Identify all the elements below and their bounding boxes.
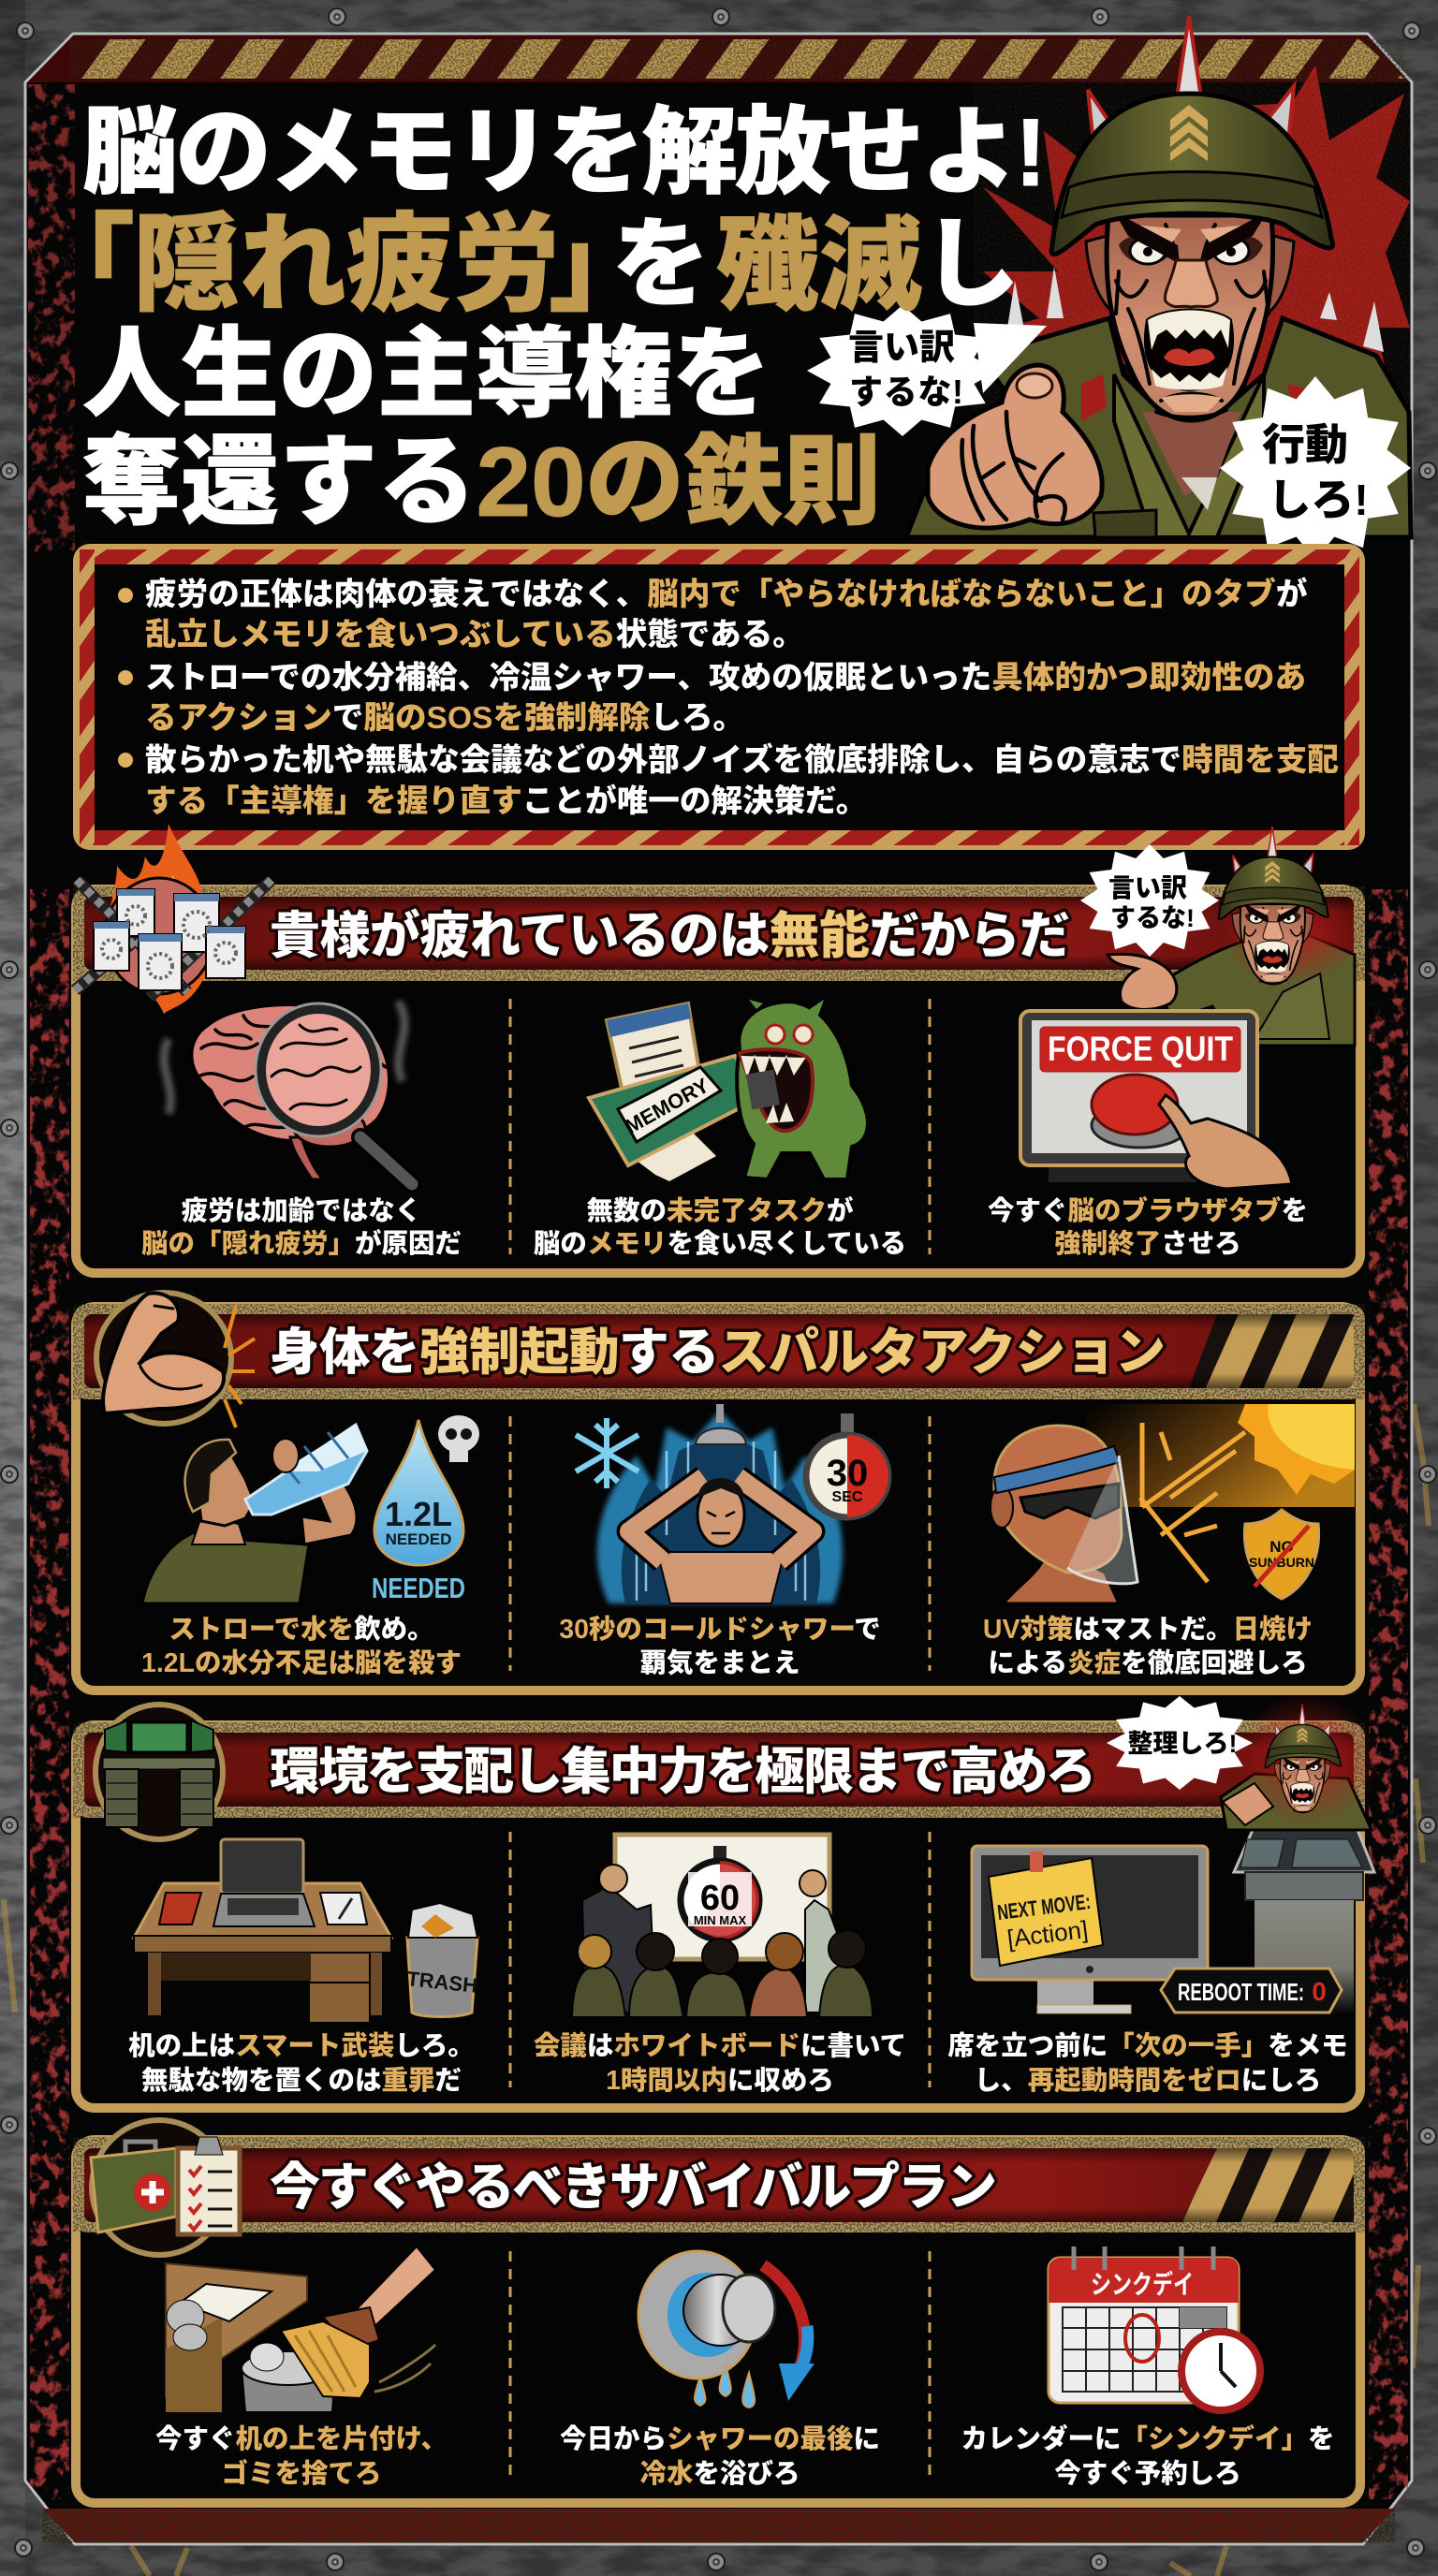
icon: UV face shield man [990, 1426, 1137, 1603]
icon: calendar with clock: シンクデイ [1091, 2269, 1194, 2299]
captions: 今すぐ脳のブラウザタブを [988, 1195, 1308, 1226]
icon: 30 sec stopwatch: 30 [827, 1453, 868, 1494]
icon: force quit monitor [1020, 1011, 1292, 1189]
icon: meeting whiteboard 60 min: MIN MAX [694, 1913, 746, 1927]
icon: no sunburn shield [1244, 1510, 1319, 1599]
icon: flexed arm badge [96, 1293, 255, 1427]
captions: 覇気をまとえ [639, 1648, 800, 1678]
captions: 疲労は加齢ではなく [182, 1196, 421, 1226]
captions: カレンダーに「シンクデイ」を [961, 2423, 1335, 2454]
icon: command desk badge [95, 1705, 223, 1839]
title: 奪還する20の鉄則 [82, 428, 881, 537]
icon: force quit monitor: FORCE QUIT [1048, 1030, 1233, 1068]
captions: 机の上はスマート武装しろ。 [128, 2031, 475, 2061]
title: 脳のメモリを解放せよ! [82, 99, 1047, 206]
title: 殲滅 [716, 209, 922, 324]
speech bubble: small: 言い訳 [1108, 873, 1187, 902]
icon: sun and reflected rays [1086, 1404, 1355, 1582]
title: し [922, 211, 1020, 319]
summary text: 散らかった机や無駄な会議などの外部ノイズを徹底排除し、自らの意志で時間を支配 [145, 741, 1339, 778]
icon: cold shower [597, 1404, 843, 1603]
captions: 今すぐ机の上を片付け、 [155, 2423, 448, 2454]
icon: desk with laptop and trash: TRASH [405, 1967, 478, 1998]
icon: 30 sec stopwatch [806, 1413, 888, 1517]
section 1 panel [73, 886, 1365, 1273]
heading: 今すぐやるべきサバイバルプラン [270, 2159, 997, 2216]
icon: desk with laptop and trash [134, 1839, 478, 2023]
speech bubble: excuse: するな! [849, 373, 963, 411]
icon: water drop 1.2L: 1.2L [385, 1495, 452, 1533]
section 4 panel [73, 2137, 1365, 2503]
summary panel [73, 544, 1365, 850]
captions: 30秒のコールドシャワーで [559, 1615, 881, 1645]
speech bubble: small [1080, 844, 1219, 957]
speech bubble: excuse: 言い訳 [848, 329, 955, 368]
top hazard stripe [69, 39, 1404, 79]
summary text: るアクションで脳のSOSを強制解除しろ。 [145, 700, 744, 736]
heading: 身体を強制起動するスパルタアクション [270, 1325, 1166, 1381]
captions: し、再起動時間をゼロにしろ [975, 2065, 1321, 2096]
title [28, 99, 1047, 537]
icon: broom sweeping desk [166, 2247, 435, 2412]
captions [141, 1195, 1308, 1259]
section 3 panel [73, 1722, 1365, 2108]
title: 隠れ疲労 [133, 206, 560, 325]
captions: 席を立つ前に「次の一手」をメモ [947, 2031, 1348, 2061]
icon: monitor with sticky note [972, 1846, 1208, 2013]
speech bubble: act: しろ! [1268, 476, 1369, 524]
icon: snowflake [576, 1418, 638, 1488]
captions: 脳の「隠れ疲労」が原因だ [141, 1228, 462, 1259]
summary text: する「主導権」を握り直すことが唯一の解決策だ。 [145, 783, 867, 819]
icon: water drop 1.2L [372, 1415, 479, 1604]
icon: man drinking water [142, 1425, 367, 1603]
heading: 環境を支配し集中力を極限まで高めろ [270, 1744, 1096, 1800]
captions: 今日からシャワーの最後に [560, 2423, 880, 2454]
icon: survival kit badge [91, 2120, 240, 2255]
icon: shower valve [638, 2251, 814, 2408]
summary text: 疲労の正体は肉体の衰えではなく、脳内で「やらなければならないこと」のタブが [145, 576, 1308, 612]
icon: monitor with sticky note: NEXT MOVE: [996, 1889, 1092, 1925]
hero: shouting soldier [906, 16, 1411, 537]
bullets [118, 588, 133, 768]
speech bubble: tidy up: 整理しろ! [1127, 1730, 1238, 1758]
captions: 強制終了させろ [1054, 1229, 1241, 1259]
icon: calendar with clock [1049, 2247, 1260, 2410]
icon: soldier on watchtower [1221, 1694, 1379, 2014]
captions [155, 2423, 1335, 2489]
captions [128, 2031, 1348, 2096]
title: 「 [28, 206, 135, 325]
heading: 貴様が疲れているのは無能だからだ [270, 907, 1070, 964]
captions: ゴミを捨てろ [221, 2458, 382, 2489]
badge: reboot time zero: 0 [1312, 1977, 1327, 2006]
captions: による炎症を徹底回避しろ [988, 1648, 1308, 1678]
title: を [612, 211, 710, 319]
captions: ストローで水を飲め。 [169, 1615, 434, 1645]
captions: 脳のメモリを食い尽くしている [534, 1229, 906, 1259]
captions: 冷水を浴びろ [639, 2459, 800, 2489]
captions: 1.2Lの水分不足は脳を殺す [141, 1648, 462, 1678]
icon: meeting whiteboard 60 min: 60 [700, 1879, 740, 1918]
summary text [145, 576, 1339, 819]
speech bubble: small: するな! [1110, 904, 1195, 932]
icon: water drop 1.2L: NEEDED [386, 1530, 451, 1548]
captions [141, 1615, 1313, 1678]
captions: 会議はホワイトボードに書いて [534, 2031, 906, 2061]
captions: 無駄な物を置くのは重罪だ [141, 2066, 462, 2096]
speech bubble: tidy up [1107, 1696, 1253, 1790]
speech bubble: excuse [807, 305, 1047, 436]
badge: reboot time zero: REBOOT TIME: [1178, 1978, 1304, 2006]
icon: no sunburn shield: SUNBURN [1249, 1555, 1314, 1570]
captions: 1時間以内に収めろ [606, 2066, 834, 2096]
icon: meeting whiteboard 60 min [572, 1835, 873, 2017]
summary text: 乱立しメモリを食いつぶしている状態である。 [145, 617, 804, 652]
icon: 30 sec stopwatch: SEC [832, 1489, 863, 1505]
captions: 無数の未完了タスクが [586, 1195, 854, 1226]
icon: memory monster [589, 1000, 868, 1181]
badge: reboot time zero [1161, 1969, 1342, 2012]
title: 人生の主導権を [82, 320, 770, 430]
captions: UV対策はマストだ。日焼け [983, 1615, 1313, 1645]
icon: memory monster: MEMORY [621, 1074, 713, 1138]
icon: water drop 1.2L: NEEDED [372, 1572, 465, 1604]
summary text: ストローでの水分補給、冷温シャワー、攻めの仮眠といった具体的かつ即効性のあ [145, 660, 1306, 695]
title: 」 [549, 206, 655, 325]
icon: brain with magnifier [164, 1002, 412, 1184]
speech bubble: act [1220, 376, 1411, 560]
speech bubble: act: 行動 [1262, 420, 1348, 469]
icon: monitor with sticky note: [Action] [1005, 1915, 1090, 1953]
icon: burning chained brain with tabs [75, 824, 271, 1014]
section 2 panel [73, 1304, 1365, 1690]
icon: small pointing soldier [1108, 827, 1362, 1046]
captions: 今すぐ予約しろ [1054, 2458, 1241, 2489]
icon: no sunburn shield: NO [1269, 1538, 1294, 1556]
